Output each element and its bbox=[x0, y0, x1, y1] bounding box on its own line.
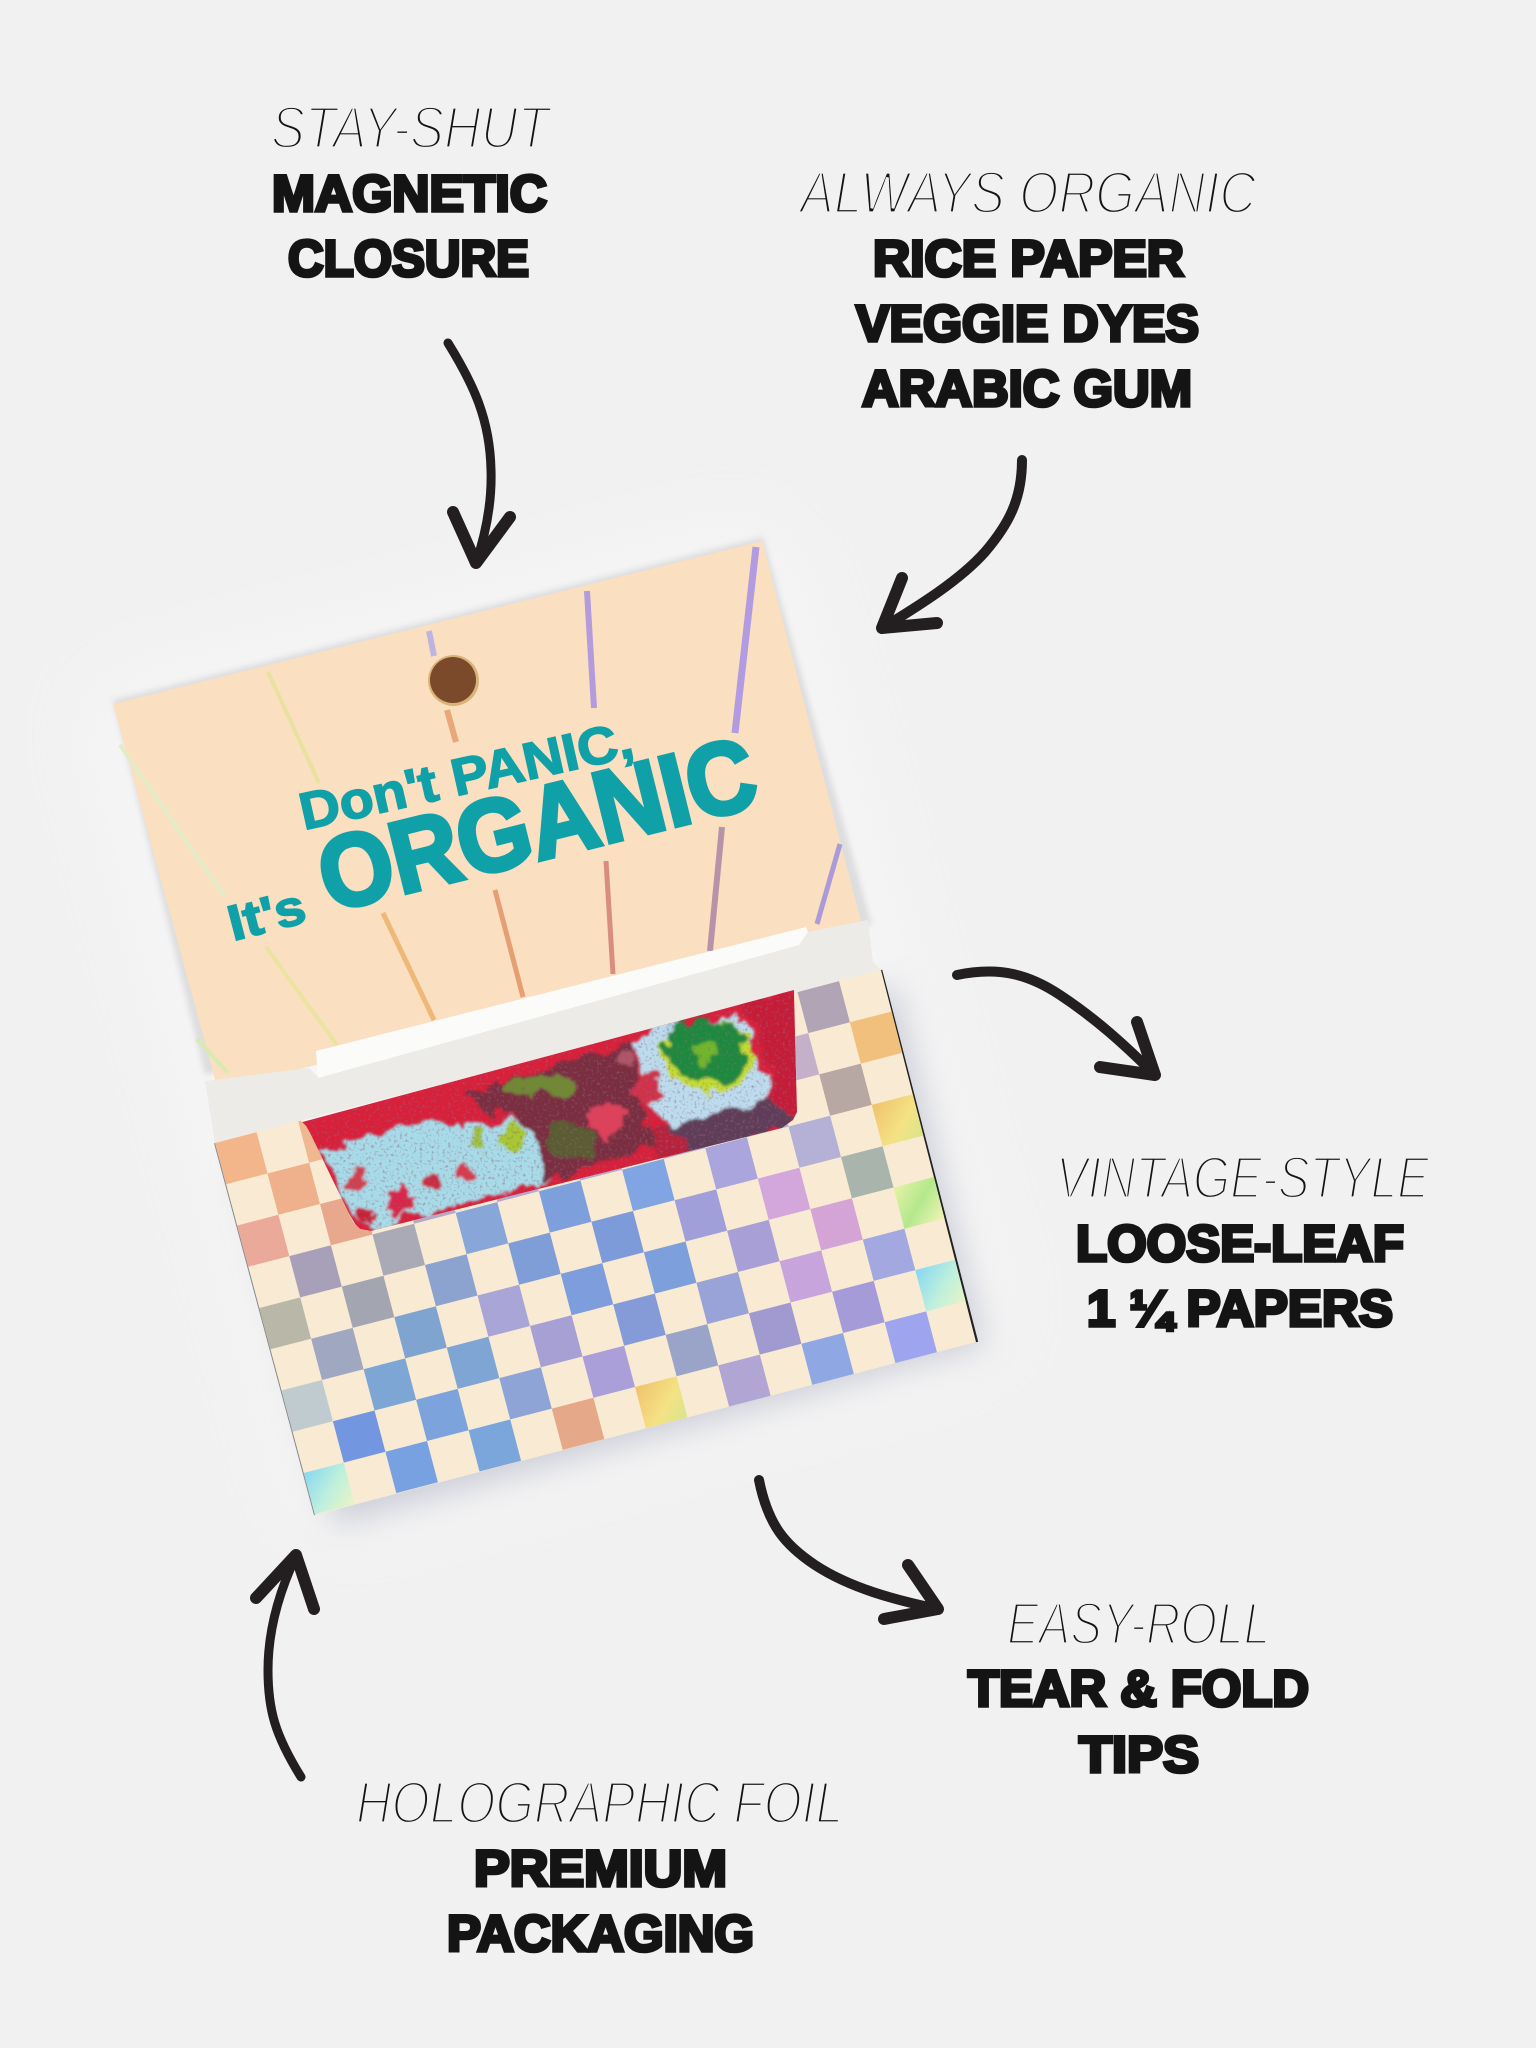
callout: easy-roll tips: EASY-ROLL bbox=[1007, 1591, 1270, 1657]
callout: holographic foil: PACKAGING bbox=[447, 1905, 754, 1962]
soft glow behind pack bbox=[90, 530, 1000, 1530]
callout: magnetic closure: STAY-SHUT bbox=[271, 95, 552, 161]
callout: magnetic closure: CLOSURE bbox=[288, 230, 529, 287]
checker pattern bbox=[215, 970, 979, 1515]
product: rolling paper pack bbox=[90, 530, 1000, 1530]
arrow: to magnetic closure bbox=[448, 343, 510, 563]
pack shadow bbox=[113, 537, 985, 1525]
foil rays bbox=[120, 547, 840, 1073]
inner white flap bbox=[205, 920, 881, 1143]
callout: vintage-style papers: LOOSE-LEAF bbox=[1076, 1215, 1404, 1272]
lid panel bbox=[113, 541, 862, 1090]
icon: magnetic closure dot bbox=[428, 655, 479, 706]
open lid bbox=[113, 541, 862, 1090]
infographic canvas bbox=[113, 108, 1428, 1954]
arrow: to rice paper pack bbox=[882, 460, 1022, 628]
rolling paper artwork bbox=[302, 990, 797, 1231]
callout: easy-roll tips bbox=[968, 1591, 1309, 1783]
callout: always organic bbox=[797, 160, 1256, 417]
holographic checkered sleeve bbox=[215, 970, 979, 1515]
callout: vintage-style papers: 1 ¼ PAPERS bbox=[1087, 1280, 1393, 1337]
arrow: to loose-leaf papers bbox=[957, 972, 1155, 1075]
callout: vintage-style papers: VINTAGE-STYLE bbox=[1056, 1145, 1430, 1211]
lid slogan: It's bbox=[222, 878, 311, 952]
callout: always organic: ALWAYS ORGANIC bbox=[797, 160, 1256, 226]
lid slogan: Don't PANIC, bbox=[294, 711, 638, 842]
callout: magnetic closure bbox=[271, 95, 552, 287]
sleeve side edges bbox=[215, 970, 977, 1515]
callout: holographic foil: HOLOGRAPHIC FOIL bbox=[356, 1770, 843, 1836]
callout: always organic: ARABIC GUM bbox=[862, 360, 1192, 417]
callout: vintage-style papers bbox=[1056, 1145, 1430, 1337]
callout: easy-roll tips: TIPS bbox=[1079, 1726, 1199, 1783]
callout: magnetic closure: MAGNETIC bbox=[272, 165, 547, 222]
callout: always organic: RICE PAPER bbox=[873, 230, 1184, 287]
arrow: to tear and fold tips bbox=[759, 1480, 938, 1619]
lid slogan: ORGANIC bbox=[307, 716, 767, 933]
callout: holographic foil bbox=[356, 1770, 843, 1962]
arrow: to holographic foil bbox=[256, 1555, 314, 1777]
callout: always organic: VEGGIE DYES bbox=[856, 295, 1199, 352]
callout: holographic foil: PREMIUM bbox=[474, 1840, 727, 1897]
sleeve panel bbox=[215, 970, 976, 1515]
callout: easy-roll tips: TEAR & FOLD bbox=[968, 1660, 1309, 1717]
